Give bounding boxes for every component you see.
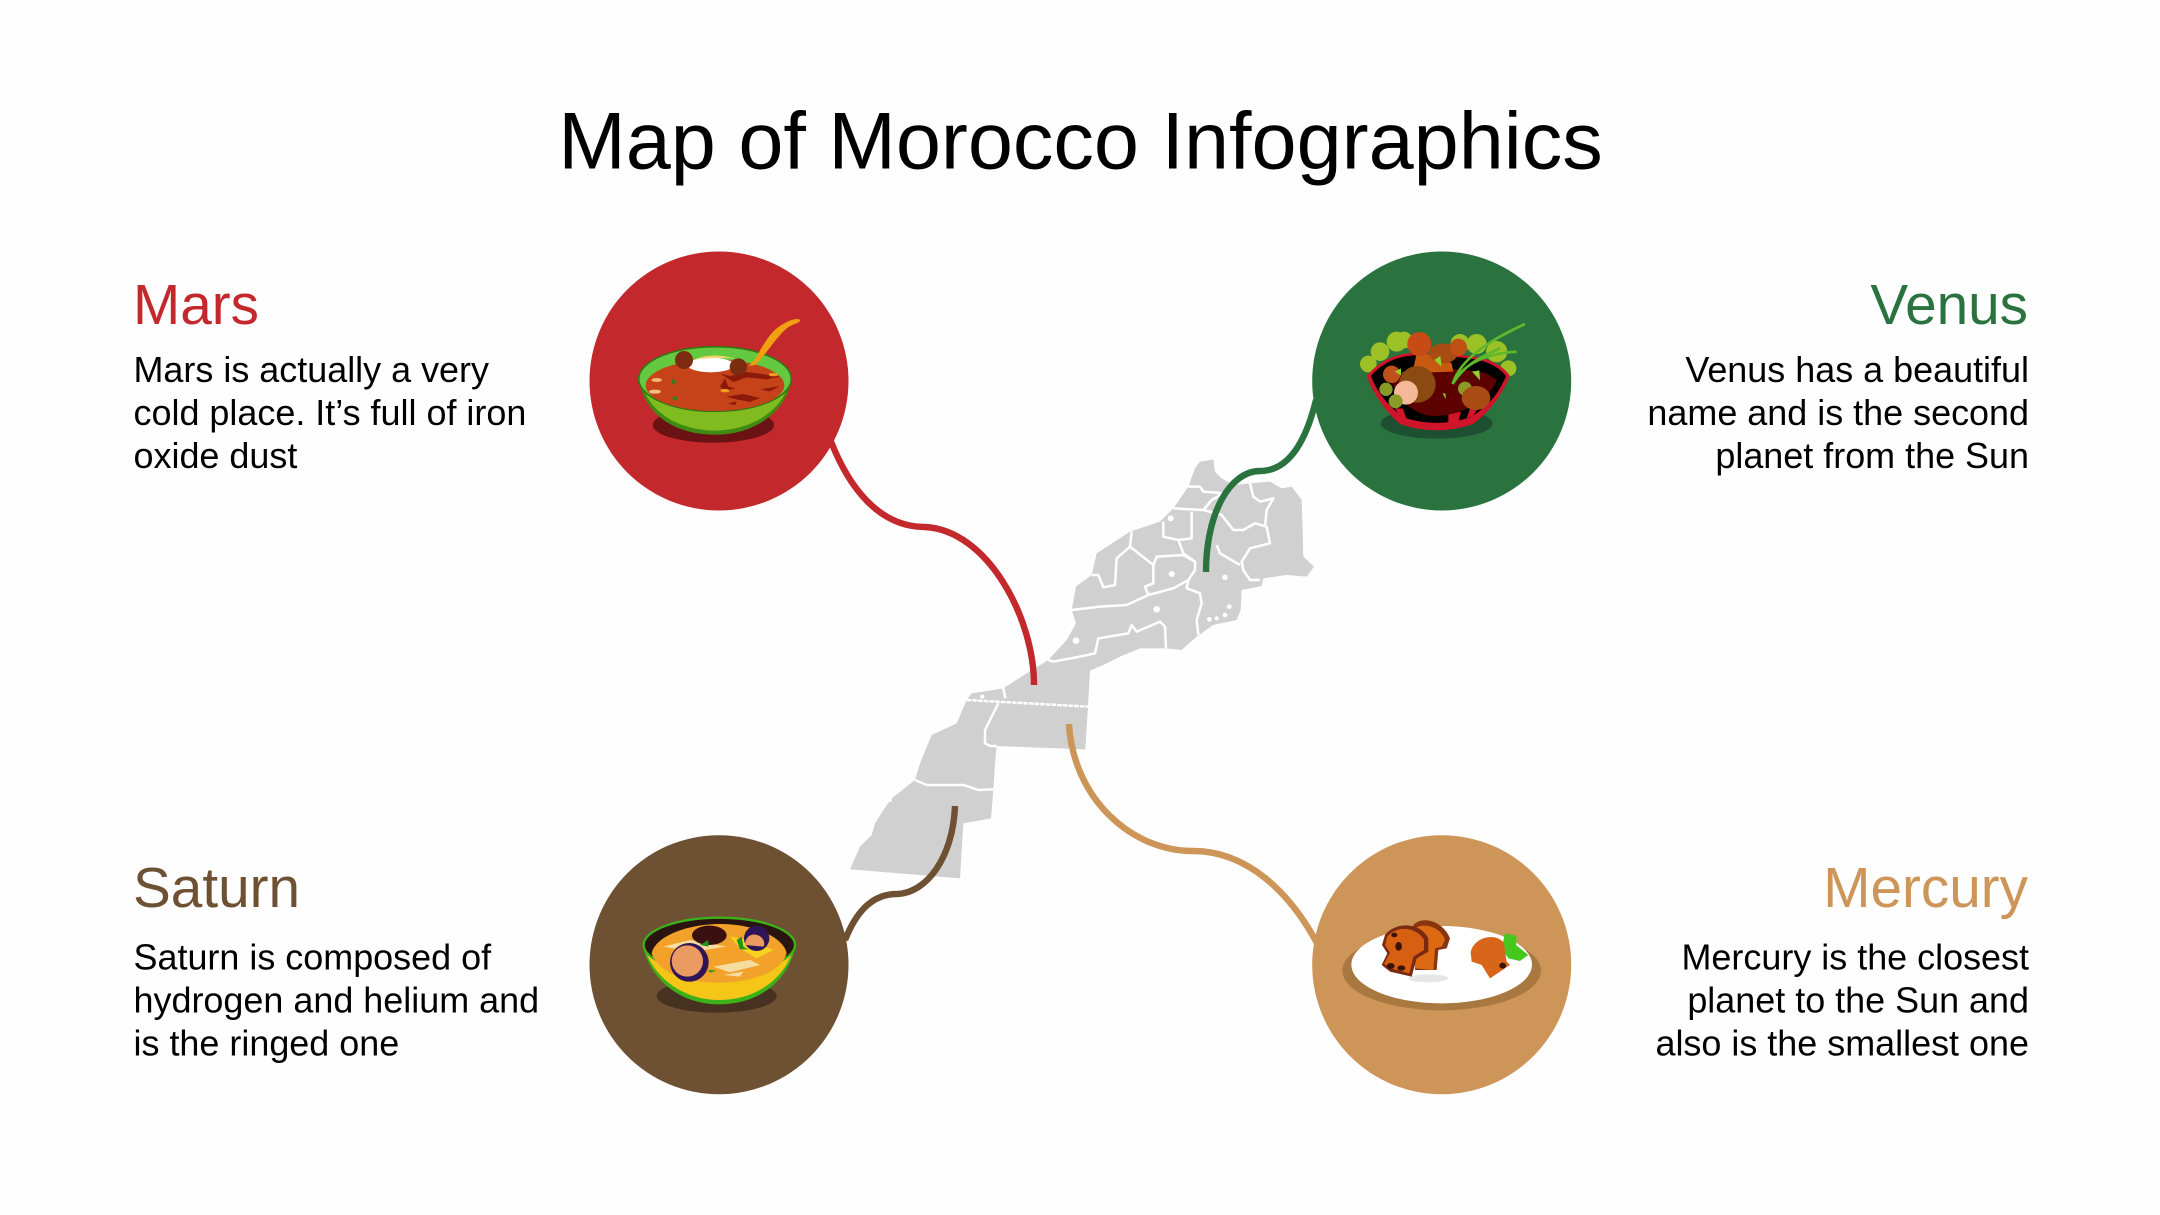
text block: Venus: Venus [1870, 274, 2028, 337]
text block: Venus: name and is the second [1647, 392, 2029, 433]
connector: Saturn [845, 806, 955, 940]
text block: Mercury: Mercury [1823, 857, 2029, 920]
text block: Saturn: Saturn is composed of [134, 936, 492, 978]
text block: Saturn [133, 857, 539, 1064]
text block: Mercury: planet to the Sun and [1687, 980, 2029, 1020]
text block: Mars: cold place. It’s full of iron [134, 392, 526, 433]
text block: Saturn: is the ringed one [134, 1022, 399, 1064]
text block: Venus [1647, 274, 2029, 476]
text block: Saturn: hydrogen and helium and [134, 980, 539, 1020]
connector: Mars [830, 439, 1034, 685]
text block: Mars: Mars [133, 274, 259, 337]
map of Morocco [850, 459, 1314, 878]
icon: Venus salad bowl [1360, 324, 1525, 439]
text block: Saturn: Saturn [133, 857, 300, 920]
text block: Mars [133, 274, 526, 476]
text block: Venus: Venus has a beautiful [1685, 349, 2029, 390]
panel: Mars circle [590, 252, 848, 510]
text block: Venus: planet from the Sun [1715, 435, 2029, 476]
text block: Mercury [1655, 857, 2029, 1064]
text block: Mars: oxide dust [134, 435, 297, 476]
icon: Saturn soup bowl [643, 918, 795, 1013]
icon: Mercury pastries on plate [1342, 920, 1541, 1010]
panel: Saturn circle [590, 835, 848, 1094]
icon: Mars soup bowl [639, 319, 800, 443]
connector: Venus [1206, 400, 1316, 572]
text block: Mars: Mars is actually a very [134, 349, 489, 390]
text block: Mercury: also is the smallest one [1655, 1022, 2029, 1064]
title: Map of Morocco Infographics [558, 96, 1603, 186]
connector: Mercury [1069, 724, 1318, 945]
panel: Venus circle [1312, 252, 1571, 510]
panel: Mercury circle [1312, 835, 1571, 1094]
text block: Mercury: Mercury is the closest [1682, 936, 2029, 978]
